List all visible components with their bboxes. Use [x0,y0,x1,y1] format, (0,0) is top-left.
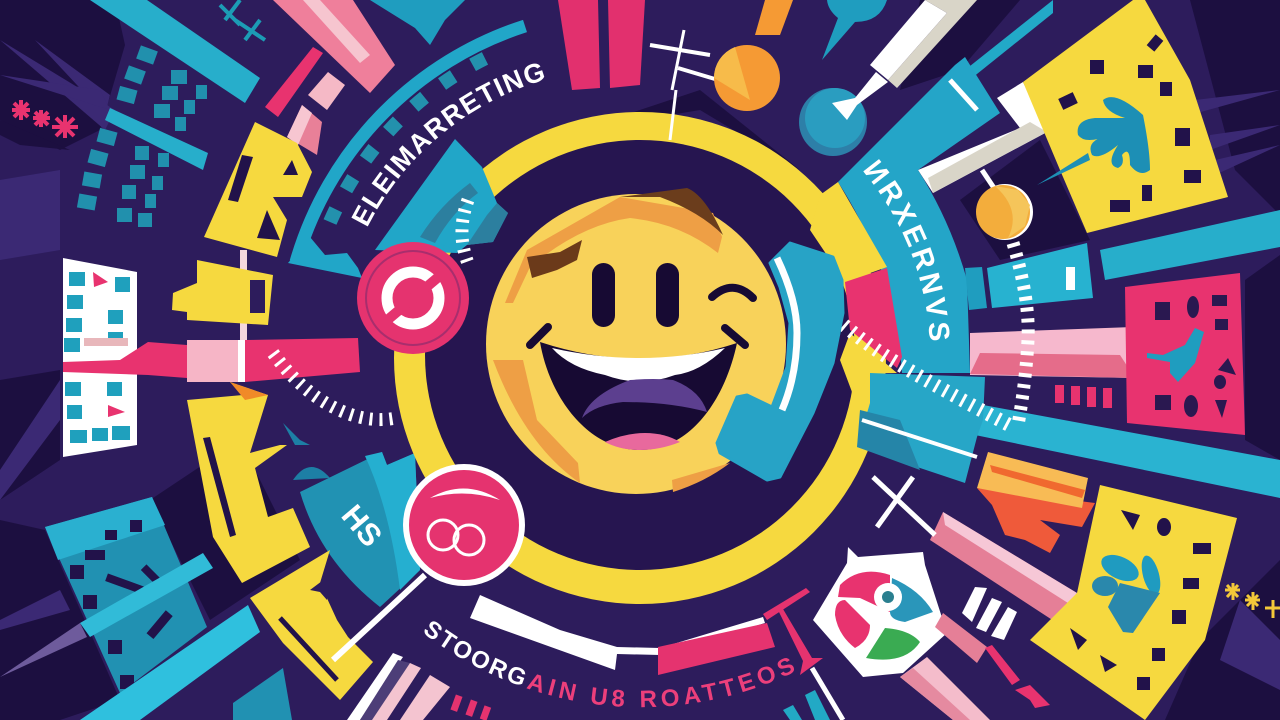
panel: lower-right orange [977,452,1095,553]
label: bottom caption pink: AIN U8 ROATTEOS [526,658,794,708]
panel: left yellow lock [204,122,312,257]
panel: top teal shape [370,0,465,45]
icon: yellow asterisks [1225,583,1280,618]
line: white stem [240,250,247,350]
ring: dark interior [425,140,855,570]
icon: small teal plants [283,423,330,480]
icon: teal asterisks [220,0,265,40]
stripes lower right [962,587,1017,640]
icon: crosshair top [650,30,735,140]
icon: lower-right shield badge [813,547,947,677]
bars bottom right [900,613,1050,720]
panel: top-right syringe [832,0,977,120]
panel: bottom-left yellow phone [187,382,310,583]
panel: yellow cup [172,260,273,325]
bar: left pink [63,338,360,382]
panel: top-left teal bands [77,0,260,227]
ring: outer yellow [394,112,886,604]
panel: right pink bar [970,327,1135,378]
panel: bottom white strip [470,595,765,670]
panel: lower-right pink bar [930,512,1077,625]
icon: left pink badge [357,242,469,354]
panel: top pink columns [558,0,645,90]
dashes near wedge [462,200,470,268]
panel: right pink block [1125,273,1245,435]
dashed arc left [273,353,396,420]
panel: right teal long band [975,405,1280,498]
panel: teal shield with glyph: HS [335,498,389,553]
icon: pink asterisks [12,100,78,138]
panel: bottom-left yellow [250,550,373,700]
icon: orange tab [755,0,793,35]
icon: teal blob spike [822,0,887,60]
label: bottom caption white: STOORG [424,621,526,684]
icon: teal ball [799,88,867,156]
icon: orange pin [976,170,1033,240]
panel: right teal arc band [838,0,1053,373]
icon: telephone handset [717,243,843,480]
label: right text: ИRXERNVS [863,159,950,340]
line: bottom white diagonal [812,668,843,720]
panel: teal shield with glyph [300,452,420,607]
label: telemarketing: ELEIMARRETING [351,64,544,226]
panel: right teal bars [965,210,1280,310]
panel: top-right yellow [1023,0,1228,233]
panel: lower-right yellow [1030,485,1237,720]
panel: bottom-left teal blocks [45,497,292,720]
panel: white syringe two [918,82,1047,193]
bottom stripes [347,653,830,720]
icon: orange ball [714,45,780,111]
icon: lollipop badge [403,464,525,586]
panel: top pink bars [265,0,395,155]
lavender streak [0,623,87,677]
panel: yellow and pink ring segment [810,182,902,400]
panel: bottom pink block [658,588,823,675]
icon: emoji face [486,188,786,494]
dashed vertical right [1013,243,1028,425]
dashed arc right [815,297,1013,427]
panel: teal lower block [857,373,985,483]
line: lollipop stem [333,575,425,660]
icon: white cross lower right [873,477,935,535]
panel: left white card [63,258,137,457]
arc: outer teal [288,26,525,278]
small pink rects [1055,385,1112,408]
panel: teal wedge [375,139,508,253]
